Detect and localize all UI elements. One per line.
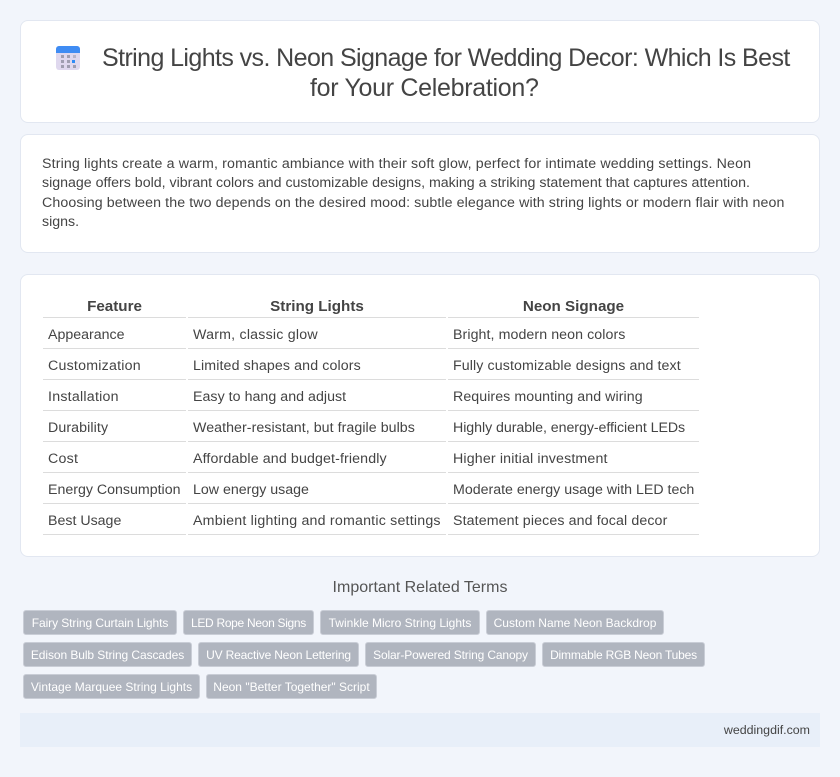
related term tags: Custom Name Neon Backdrop bbox=[494, 616, 656, 630]
table row: cost: Higher initial investment bbox=[453, 451, 608, 467]
table row: best usage: Statement pieces and focal decor bbox=[453, 513, 667, 529]
related term tags: Twinkle Micro String Lights bbox=[329, 616, 471, 630]
table row: best usage: Best Usage bbox=[48, 513, 121, 529]
title: String Lights vs. Neon Signage for Wedding Decor: Which Is Best bbox=[102, 44, 790, 72]
title bbox=[102, 44, 790, 102]
table row: durability: Weather-resistant, but fragile bulbs bbox=[193, 420, 415, 436]
related term tags: Vintage Marquee String Lights bbox=[31, 680, 192, 694]
intro text: Choosing between the two depends on the desired mood: subtle elegance with string lights or modern flair with neon bbox=[42, 195, 784, 211]
table row: best usage bbox=[48, 513, 668, 529]
table header bbox=[87, 298, 624, 315]
related term tags: Solar-Powered String Canopy bbox=[373, 648, 528, 662]
table header: String Lights bbox=[270, 298, 364, 315]
table row: durability: Highly durable, energy-efficient LEDs bbox=[453, 420, 685, 436]
title: for Your Celebration? bbox=[310, 74, 539, 102]
panel: introduction bbox=[20, 134, 820, 253]
table row: appearance: Appearance bbox=[48, 327, 125, 343]
table row: customization: Limited shapes and colors bbox=[193, 358, 361, 374]
table row: appearance bbox=[48, 327, 625, 343]
table row: appearance: Warm, classic glow bbox=[193, 327, 318, 343]
footer source: weddingdif.com bbox=[724, 723, 810, 737]
table row: installation bbox=[48, 389, 643, 405]
table row: durability: Durability bbox=[48, 420, 108, 436]
table row: installation: Installation bbox=[48, 389, 119, 405]
heading: related terms: Important Related Terms bbox=[333, 579, 507, 596]
table row: energy consumption bbox=[48, 482, 694, 498]
intro text: signage offers bold, vibrant colors and customizable designs, making a striking statement that captures attention. bbox=[42, 175, 750, 191]
intro text: String lights create a warm, romantic ambiance with their soft glow, perfect for intimate wedding settings. Neon bbox=[42, 156, 751, 172]
table row: customization: Fully customizable designs and text bbox=[453, 358, 681, 374]
table row: cost: Cost bbox=[48, 451, 78, 467]
table row: best usage: Ambient lighting and romantic settings bbox=[193, 513, 441, 529]
panel: title card bbox=[20, 20, 820, 123]
related term tags: LED Rope Neon Signs bbox=[191, 616, 306, 630]
table header: Neon Signage bbox=[523, 298, 624, 315]
related term tags: Edison Bulb String Cascades bbox=[31, 648, 184, 662]
table row: appearance: Bright, modern neon colors bbox=[453, 327, 625, 343]
intro text: signs. bbox=[42, 214, 79, 230]
table row: installation: Requires mounting and wiring bbox=[453, 389, 643, 405]
table row: customization: Customization bbox=[48, 358, 141, 374]
table row: installation: Easy to hang and adjust bbox=[193, 389, 346, 405]
intro text bbox=[42, 156, 784, 230]
table row: cost: Affordable and budget-friendly bbox=[193, 451, 387, 467]
related term tags bbox=[23, 610, 705, 699]
table header: Feature bbox=[87, 298, 142, 315]
icon: calendar bbox=[56, 46, 80, 70]
table row: cost bbox=[48, 451, 608, 467]
table row: customization bbox=[48, 358, 681, 374]
table row: durability bbox=[48, 420, 685, 436]
related term tags: UV Reactive Neon Lettering bbox=[206, 648, 351, 662]
related term tags: Fairy String Curtain Lights bbox=[32, 616, 168, 630]
footer bar bbox=[20, 713, 820, 747]
related term tags: Dimmable RGB Neon Tubes bbox=[550, 648, 697, 662]
table row: energy consumption: Moderate energy usage with LED tech bbox=[453, 482, 694, 498]
related term tags: Neon "Better Together" Script bbox=[213, 680, 370, 694]
table row: energy consumption: Energy Consumption bbox=[48, 482, 180, 498]
table row: energy consumption: Low energy usage bbox=[193, 482, 309, 498]
